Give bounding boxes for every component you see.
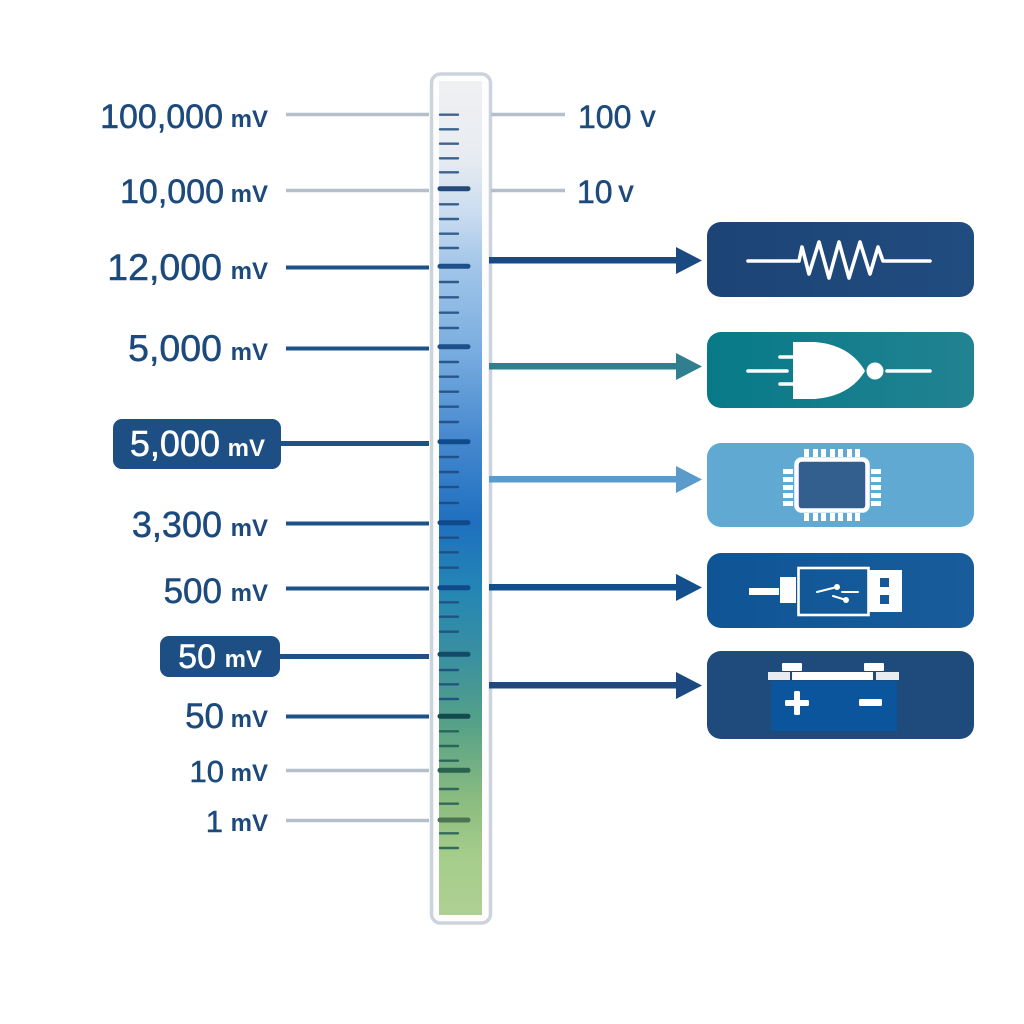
panel: logic gate bbox=[707, 332, 974, 408]
arrow to microchip bbox=[489, 466, 702, 493]
label: 50 mV: 50 bbox=[185, 697, 224, 736]
panel: battery bbox=[707, 651, 974, 739]
label: 3,300 mV bbox=[132, 504, 268, 545]
highlighted label: 5,000 mV bbox=[113, 419, 281, 469]
label: 10 mV bbox=[190, 754, 268, 789]
label: 5,000 mV: mV bbox=[231, 339, 268, 366]
label: 500 mV: mV bbox=[231, 580, 268, 607]
scale tube bbox=[432, 74, 490, 923]
highlighted label: 5,000 mV: mV bbox=[228, 435, 265, 462]
label: 10,000 mV: mV bbox=[231, 181, 268, 208]
arrow to USB bbox=[489, 574, 702, 601]
label: 100 V bbox=[578, 99, 656, 135]
panel: microchip bbox=[707, 443, 974, 527]
label: 3,300 mV: mV bbox=[231, 515, 268, 542]
icon: resistor bbox=[748, 242, 930, 278]
label: 1 mV bbox=[206, 804, 268, 839]
highlighted label: 50 mV bbox=[160, 636, 280, 677]
highlighted label: 5,000 mV: 5,000 bbox=[130, 423, 220, 464]
label: 12,000 mV: 12,000 bbox=[107, 246, 222, 288]
label: 10 mV: mV bbox=[231, 760, 268, 787]
label: 100 V: 100 bbox=[578, 99, 631, 135]
label: 12,000 mV: mV bbox=[231, 258, 268, 285]
label: 50 mV: mV bbox=[231, 706, 268, 733]
label: 1 mV: mV bbox=[231, 810, 268, 837]
label: 100,000 mV: 100,000 bbox=[100, 98, 223, 136]
arrow to battery bbox=[489, 672, 702, 699]
arrow to logic gate bbox=[489, 353, 702, 380]
panel: USB bbox=[707, 553, 974, 628]
leader lines: left and right bbox=[279, 114, 565, 820]
label: 10 V bbox=[577, 174, 634, 210]
icon: battery bbox=[768, 663, 899, 731]
label: 500 mV: 500 bbox=[164, 572, 222, 611]
label: 500 mV bbox=[164, 572, 268, 611]
label: 5,000 mV bbox=[128, 327, 268, 369]
label: 5,000 mV: 5,000 bbox=[128, 327, 222, 369]
label: 10 mV: 10 bbox=[190, 754, 224, 789]
arrow to resistor bbox=[489, 247, 702, 274]
label: 10,000 mV: 10,000 bbox=[120, 173, 224, 211]
label: 1 mV: 1 bbox=[206, 804, 223, 839]
label: 10 V: V bbox=[618, 181, 634, 208]
tick marks bbox=[440, 115, 468, 848]
icon: USB plug bbox=[749, 568, 902, 615]
highlighted label: 50 mV: 50 bbox=[178, 638, 216, 676]
label: 50 mV bbox=[185, 697, 268, 736]
highlighted label: 50 mV: mV bbox=[225, 646, 262, 673]
icon: microchip bbox=[783, 449, 881, 521]
label: 100 V: V bbox=[640, 106, 656, 133]
icon: NOR gate bbox=[748, 342, 930, 399]
label: 100,000 mV: mV bbox=[231, 106, 268, 133]
label: 10 V: 10 bbox=[577, 174, 613, 210]
label: 3,300 mV: 3,300 bbox=[132, 504, 222, 545]
panel: resistor bbox=[707, 222, 974, 297]
